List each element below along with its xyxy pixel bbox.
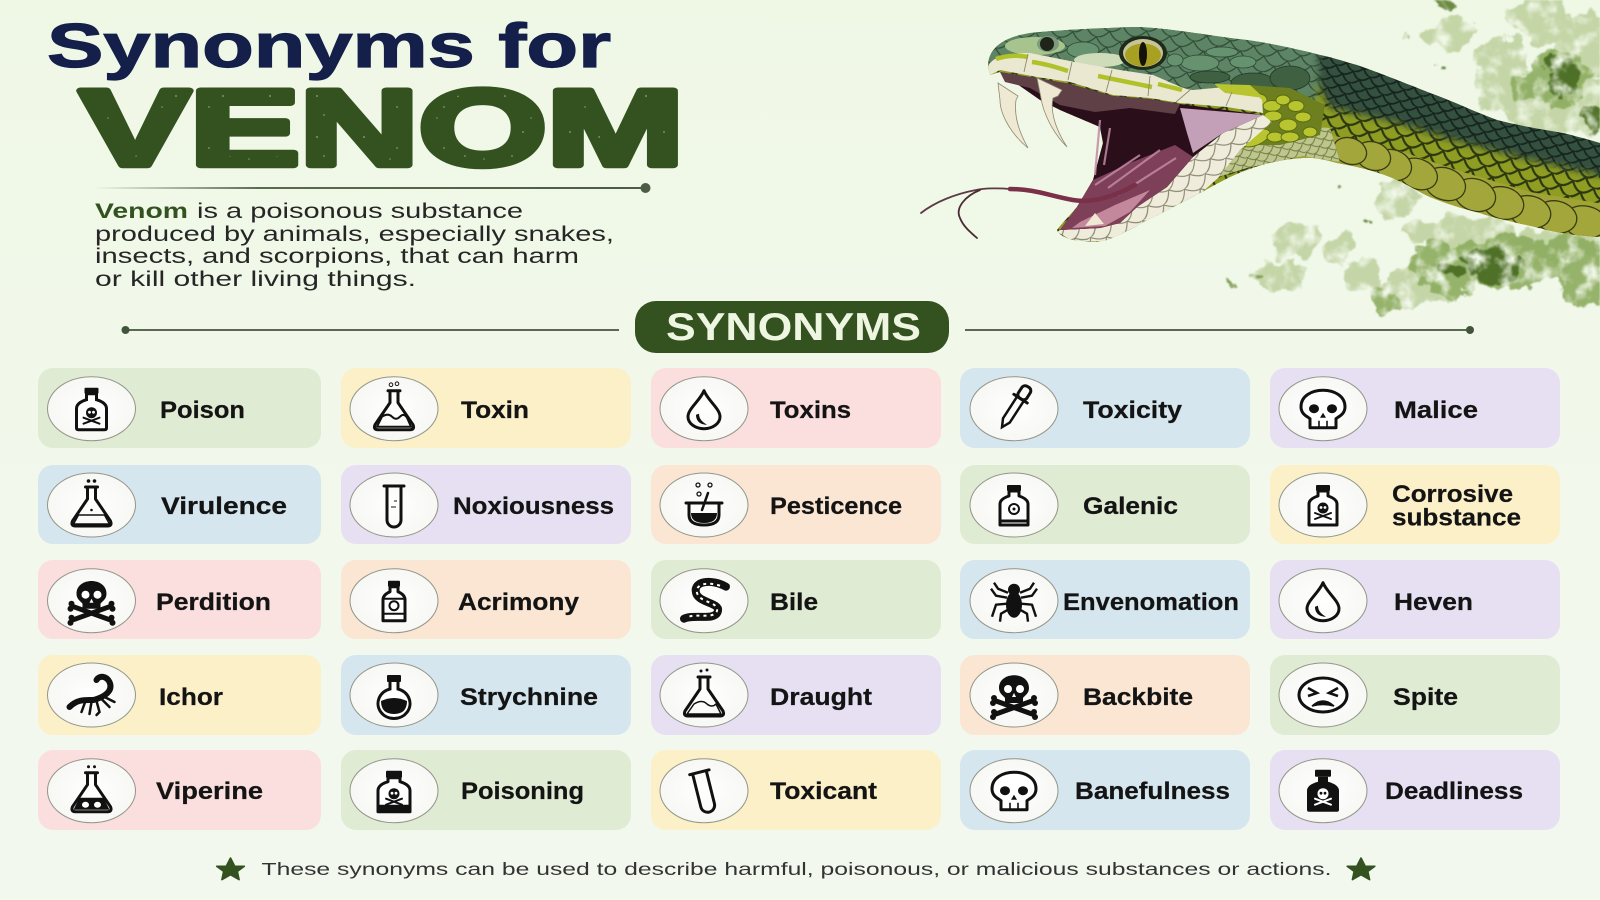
label: Strychnine bbox=[460, 684, 598, 711]
card: Banefulness bbox=[960, 750, 1250, 830]
label: Galenic bbox=[1083, 493, 1178, 520]
section header: synonyms bbox=[122, 301, 1474, 353]
label: Spite bbox=[1393, 684, 1458, 711]
icon: drop bbox=[660, 377, 748, 441]
label: Virulence bbox=[161, 493, 287, 520]
illustration: striking green snake bbox=[920, 27, 1600, 242]
snake mouth bbox=[1000, 72, 1263, 230]
snake fangs bbox=[998, 78, 1067, 148]
label: Ichor bbox=[159, 684, 223, 711]
card: Poisoning bbox=[341, 750, 631, 830]
card: Pesticence bbox=[651, 465, 941, 544]
label: Malice bbox=[1394, 397, 1478, 424]
definition text: or kill other living things. bbox=[95, 267, 416, 291]
card: Toxins bbox=[651, 368, 941, 448]
icon: flask bbox=[48, 473, 136, 537]
definition text: is a poisonous substance bbox=[197, 199, 523, 223]
definition text: produced by animals, especially snakes, bbox=[95, 222, 614, 246]
icon: tilted test tube bbox=[660, 759, 748, 823]
section header: synonyms: SYNONYMS bbox=[666, 306, 921, 349]
card: Malice bbox=[1270, 368, 1560, 448]
card: Spite bbox=[1270, 655, 1560, 735]
snake eye bbox=[1037, 36, 1167, 70]
icon: half filled poison bottle bbox=[350, 759, 438, 823]
label: Toxin bbox=[461, 397, 529, 424]
card: Perdition bbox=[38, 560, 321, 639]
card: Bile bbox=[651, 560, 941, 639]
card: Strychnine bbox=[341, 655, 631, 735]
card: Corrosive substance bbox=[1270, 465, 1560, 544]
card: Heven bbox=[1270, 560, 1560, 639]
title: Synonyms for bbox=[47, 12, 611, 81]
title: VENOM bbox=[80, 67, 684, 188]
icon: dropper bbox=[941, 337, 1087, 481]
label: Toxicant bbox=[770, 778, 877, 805]
label: Backbite bbox=[1083, 684, 1193, 711]
card: Toxin bbox=[341, 368, 631, 448]
snake head cap bbox=[988, 27, 1324, 102]
snake upper lip bbox=[988, 53, 1264, 113]
card: Deadliness bbox=[1270, 750, 1560, 830]
label: Corrosive bbox=[1392, 481, 1513, 508]
label: Noxiousness bbox=[453, 493, 614, 520]
snake tongue bbox=[1010, 185, 1135, 201]
card: Toxicity bbox=[941, 337, 1250, 481]
icon: snake bbox=[660, 569, 748, 633]
card: Virulence bbox=[38, 465, 321, 544]
definition text: insects, and scorpions, that can harm bbox=[95, 244, 579, 268]
label bbox=[1392, 481, 1521, 532]
label: Viperine bbox=[156, 778, 263, 805]
icon: test tube bbox=[350, 473, 438, 537]
label: Banefulness bbox=[1075, 778, 1230, 805]
label: Envenomation bbox=[1063, 589, 1239, 616]
icon: labelled bottle bbox=[970, 473, 1058, 537]
card: Envenomation bbox=[960, 560, 1250, 639]
icon: round flask bbox=[350, 663, 438, 727]
label: Toxicity bbox=[1083, 397, 1183, 424]
card: Acrimony bbox=[341, 560, 631, 639]
icon: labelled bottle bbox=[1279, 473, 1367, 537]
card: Toxicant bbox=[651, 750, 941, 830]
label: Poisoning bbox=[461, 778, 584, 805]
label: Acrimony bbox=[458, 589, 580, 616]
card: Ichor bbox=[38, 655, 321, 735]
snake lower jaw bbox=[1057, 115, 1272, 241]
footer note bbox=[217, 858, 1375, 880]
icon: slim bottle bbox=[350, 569, 438, 633]
icon: skull outline bbox=[970, 759, 1058, 823]
icon: flask with drop bbox=[350, 377, 438, 441]
card: Viperine bbox=[38, 750, 321, 830]
title bbox=[47, 12, 684, 188]
icon: poison bottle bbox=[48, 377, 136, 441]
icon: angry face bbox=[1279, 663, 1367, 727]
label: Bile bbox=[770, 589, 818, 616]
icon: skull outline bbox=[1279, 377, 1367, 441]
definition text: Venom bbox=[95, 199, 188, 223]
label: substance bbox=[1392, 504, 1521, 532]
icon: bubbling beaker bbox=[660, 473, 748, 537]
icon: skull and crossbones bbox=[48, 569, 136, 633]
icon: drop bbox=[1279, 569, 1367, 633]
icon: flask bbox=[660, 663, 748, 727]
label: Draught bbox=[770, 684, 872, 711]
snake neck scales bbox=[1215, 125, 1340, 178]
icon: skull and crossbones bbox=[970, 663, 1058, 727]
card: Galenic bbox=[960, 465, 1250, 544]
card: Draught bbox=[651, 655, 941, 735]
label: Heven bbox=[1394, 589, 1473, 616]
icon: scorpion bbox=[48, 663, 136, 727]
label: Perdition bbox=[156, 589, 271, 616]
card: Noxiousness bbox=[341, 465, 631, 544]
venom splatter bbox=[1232, 0, 1600, 314]
divider with dot bbox=[94, 183, 650, 193]
label: Pesticence bbox=[770, 493, 902, 520]
card: Backbite bbox=[960, 655, 1250, 735]
label: Toxins bbox=[770, 397, 851, 424]
label: Poison bbox=[160, 397, 245, 424]
icon: filled flask bbox=[48, 759, 136, 823]
card: Poison bbox=[38, 368, 321, 448]
icon: solid poison bottle bbox=[1279, 759, 1367, 823]
footer note: These synonyms can be used to describe harmful, poisonous, or malicious substances or actions. bbox=[262, 859, 1332, 879]
definition text bbox=[95, 199, 614, 291]
label: Deadliness bbox=[1385, 778, 1523, 805]
icon: spider bbox=[970, 569, 1058, 633]
